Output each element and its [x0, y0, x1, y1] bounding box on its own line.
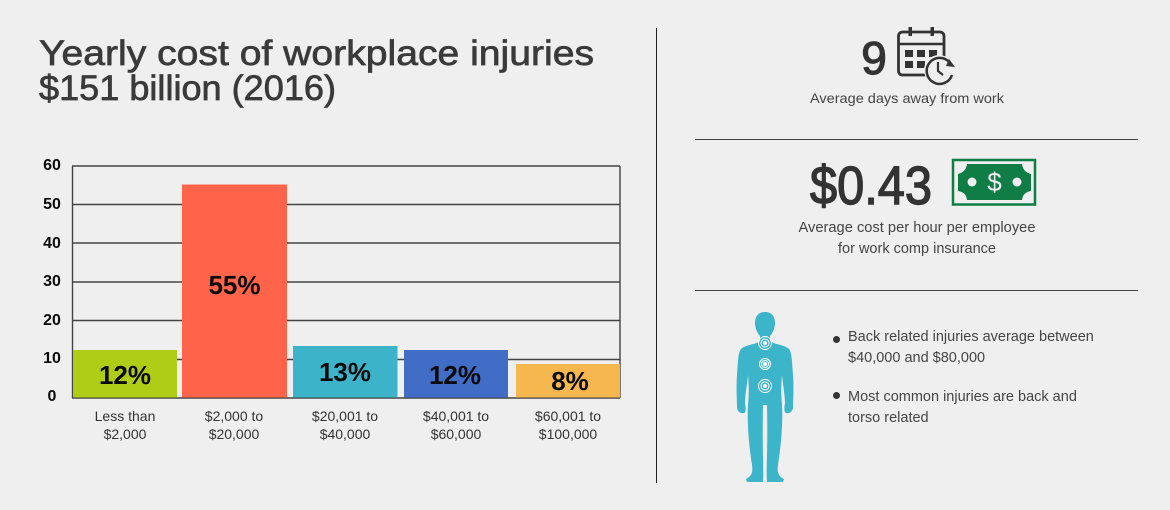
stat: days away from work: 9	[861, 32, 887, 84]
bullet list: back injuries: Back related injuries average between	[848, 329, 1094, 345]
y axis labels: 30	[43, 273, 61, 290]
x axis labels: $2,000	[104, 426, 147, 442]
x axis labels: $60,000	[431, 426, 482, 442]
y axis labels: 50	[43, 196, 61, 213]
stat: days away from work: Average days away from work	[810, 90, 1005, 106]
y axis labels: 10	[43, 350, 61, 367]
bar: $40,001 to $60,000: 12%	[429, 360, 481, 390]
stat: hourly cost	[798, 156, 1036, 257]
bar: $60,001 to $100,000: 8%	[551, 366, 589, 396]
x axis labels: $100,000	[539, 426, 597, 442]
x axis labels: $20,000	[209, 426, 260, 442]
x axis labels: Less than	[95, 408, 155, 424]
bar: $20,001 to $40,000	[293, 346, 398, 398]
x axis labels: $2,000 to	[205, 408, 263, 424]
x axis labels: $40,001 to	[423, 408, 489, 424]
x axis labels: $20,001 to	[312, 408, 378, 424]
bar: $60,001 to $100,000	[516, 364, 620, 398]
icon: dollar bill	[953, 160, 1035, 204]
stat: hourly cost: $0.43	[810, 156, 932, 216]
icon: dollar bill: $	[987, 167, 1002, 197]
y axis labels: 40	[43, 235, 61, 252]
icon: human body with pain points	[737, 312, 793, 482]
stat: days away from work	[810, 27, 1005, 106]
stat: hourly cost: Average cost per hour per employee	[798, 220, 1036, 236]
stat: hourly cost: for work comp insurance	[838, 241, 996, 257]
title: $151 billion (2016)	[39, 69, 336, 108]
bar: $40,001 to $60,000	[404, 350, 508, 398]
bullet list: back injuries: torso related	[848, 410, 929, 426]
y axis labels: 0	[48, 388, 57, 405]
bullet list: back injuries: Most common injuries are back and	[848, 389, 1077, 405]
bar chart: cost distribution	[43, 157, 620, 442]
bar: $20,001 to $40,000: 13%	[319, 357, 371, 387]
bar: $2,000 to $20,000	[182, 184, 287, 398]
x axis labels	[95, 408, 601, 442]
y axis labels: 20	[43, 312, 61, 329]
y axis labels: 60	[43, 157, 61, 174]
bar: less than $2,000	[73, 350, 177, 398]
x axis labels: $40,000	[320, 426, 371, 442]
bullet list: back injuries: $40,000 and $80,000	[848, 350, 985, 366]
icon: calendar with clock	[898, 27, 955, 85]
title: Yearly cost of workplace injuries	[39, 34, 594, 73]
title	[39, 34, 594, 108]
bullet list: back injuries	[833, 329, 1094, 426]
bar: $2,000 to $20,000: 55%	[208, 270, 261, 300]
bar: less than $2,000: 12%	[99, 360, 151, 390]
y axis labels	[43, 157, 61, 405]
x axis labels: $60,001 to	[535, 408, 601, 424]
